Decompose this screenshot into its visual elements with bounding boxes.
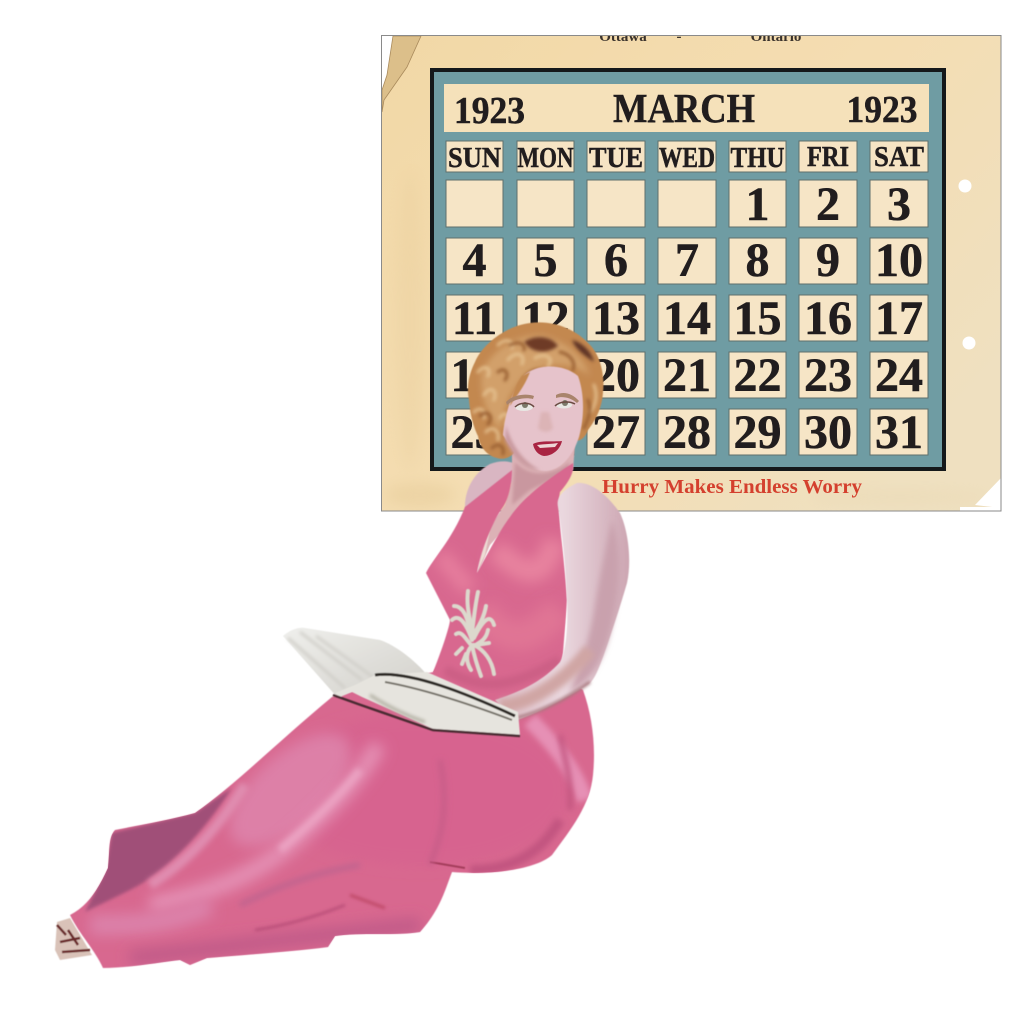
calendar teal grid xyxy=(432,70,944,469)
right arm xyxy=(495,483,629,720)
motto: Hurry Makes Endless Worry xyxy=(602,476,862,498)
weekday row: SUN xyxy=(448,142,501,174)
neck and chest xyxy=(477,445,575,575)
date numbers: 9 xyxy=(816,234,840,287)
rear arm sliver xyxy=(433,648,452,680)
date numbers: 27 xyxy=(592,406,640,459)
date numbers: 20 xyxy=(592,349,640,402)
pink gown xyxy=(70,463,594,968)
weekday row: TUE xyxy=(589,142,643,174)
date numbers xyxy=(450,178,923,459)
date numbers: 26 xyxy=(522,406,570,459)
date numbers: 8 xyxy=(746,234,770,287)
dark rear fold xyxy=(85,788,232,912)
date numbers: 22 xyxy=(734,349,782,402)
date numbers: 19 xyxy=(522,349,570,402)
weekday row xyxy=(446,141,928,174)
hair xyxy=(468,322,603,459)
date numbers: 3 xyxy=(887,178,911,231)
date numbers: 12 xyxy=(522,292,570,345)
date numbers: 6 xyxy=(604,234,628,287)
date numbers: 29 xyxy=(734,406,782,459)
paper stains xyxy=(394,486,446,504)
figure: woman in pink gown reading xyxy=(55,322,629,968)
weekday row: THU xyxy=(730,142,785,174)
torn top-left corner xyxy=(382,36,393,90)
left shoulder skin xyxy=(465,461,516,515)
publisher line, clipped: Ottawa xyxy=(599,29,647,45)
date cells xyxy=(446,180,928,455)
open book xyxy=(283,628,520,736)
date numbers: 18 xyxy=(450,349,498,402)
face xyxy=(503,366,583,471)
date numbers: 10 xyxy=(875,234,923,287)
date numbers: 2 xyxy=(816,178,840,231)
date numbers: 7 xyxy=(675,234,699,287)
date numbers: 30 xyxy=(804,406,852,459)
date numbers: 28 xyxy=(663,406,711,459)
skirt base tone xyxy=(270,715,570,865)
torn bottom-right corner xyxy=(975,478,1001,508)
date numbers: 15 xyxy=(734,292,782,345)
weekday row: FRI xyxy=(807,141,849,173)
month header: 1923 xyxy=(454,90,525,132)
aged paper sheet xyxy=(382,36,1001,511)
date numbers: 14 xyxy=(663,292,711,345)
publisher line, clipped: Ontario xyxy=(751,29,801,45)
gown highlights xyxy=(150,745,378,905)
weekday row: WED xyxy=(659,142,715,174)
publisher line, clipped xyxy=(600,36,801,41)
publisher line, clipped: - xyxy=(676,29,682,45)
date numbers: 4 xyxy=(462,234,486,287)
date numbers: 1 xyxy=(746,178,770,231)
foot and sandal xyxy=(55,918,92,960)
weekday row: MON xyxy=(518,142,574,174)
date numbers: 16 xyxy=(804,292,852,345)
date numbers: 25 xyxy=(450,406,498,459)
date numbers: 31 xyxy=(875,406,923,459)
date numbers: 13 xyxy=(592,292,640,345)
date numbers: 24 xyxy=(875,349,923,402)
panel: 1923 March calendar xyxy=(382,29,1001,511)
punched holes xyxy=(958,180,976,350)
month header xyxy=(444,84,929,132)
month header: MARCH xyxy=(613,85,755,131)
gown shadows xyxy=(130,925,420,958)
bodice tones xyxy=(480,610,560,636)
date numbers: 23 xyxy=(804,349,852,402)
month header: 1923 xyxy=(846,89,918,131)
weekday row: SAT xyxy=(874,141,924,173)
date numbers: 21 xyxy=(663,349,711,402)
brooch xyxy=(452,591,494,676)
date numbers: 17 xyxy=(875,292,923,345)
date numbers: 11 xyxy=(452,292,497,345)
date numbers: 5 xyxy=(534,234,558,287)
